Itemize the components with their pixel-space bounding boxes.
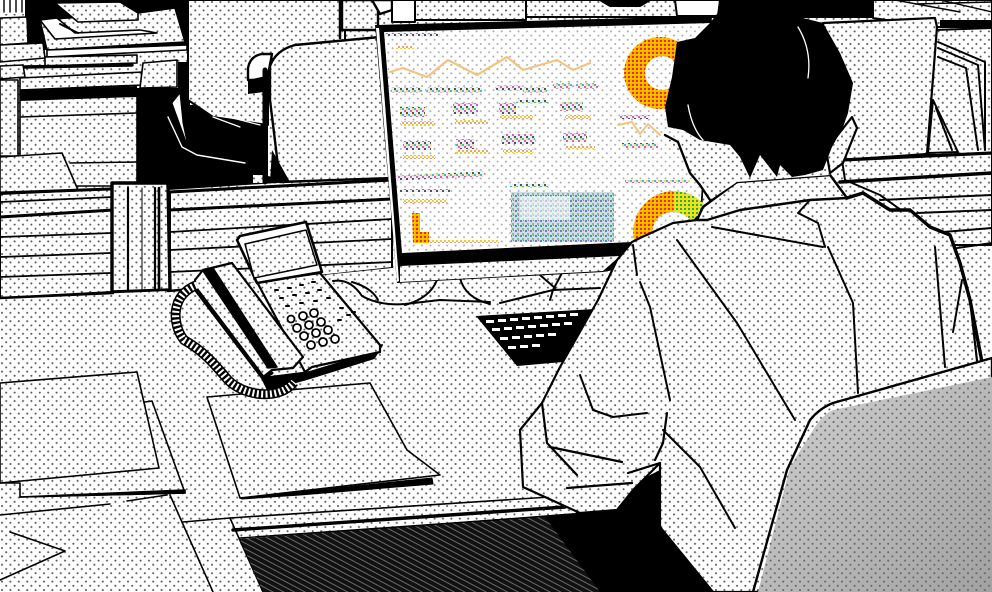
panel behind head: [823, 18, 937, 160]
desk surface: [0, 268, 640, 520]
office chair back in background: [248, 0, 392, 182]
right background binders: [925, 28, 992, 155]
gray office chair foreground: [753, 358, 992, 592]
phone handset: [195, 263, 303, 378]
monitor frame: [375, 16, 712, 283]
under desk hatching: [240, 470, 713, 592]
person shirt: [520, 175, 985, 592]
person hair: [665, 3, 853, 178]
phone coiled cord: [176, 285, 294, 394]
phone shadow: [262, 345, 382, 390]
dark area behind partition: [137, 62, 292, 190]
donut chart bottom green segment: [673, 191, 705, 222]
background: top shelf behind monitor: [392, 0, 992, 28]
background: shelves and stacked papers top left: [0, 0, 190, 194]
partition post: [112, 183, 170, 292]
person standing behind: torso and trousers: [168, 0, 345, 183]
phone display: [237, 222, 322, 283]
screen: dashboard content: [385, 33, 690, 243]
monitor cables and stand: [333, 273, 600, 305]
shirt collar: [697, 175, 847, 220]
donut chart bottom: [633, 191, 673, 240]
monitor: [375, 16, 712, 283]
desk phone: [176, 222, 382, 394]
person neck and ears: [665, 117, 857, 200]
desk front edge: [183, 496, 565, 592]
paper stack, left: [0, 372, 213, 592]
paper on desk, centre: [207, 383, 440, 499]
partition right: [840, 153, 992, 248]
monitor screen: [384, 23, 712, 253]
shirt folds: [542, 200, 962, 528]
donut chart top: [624, 37, 696, 109]
chart: red L-shaped bars: [412, 213, 429, 243]
keyboard: [476, 309, 595, 366]
phone base: [257, 273, 380, 372]
phone keypad: [288, 309, 339, 349]
desk partition left: [0, 180, 392, 298]
shirt outline right: [847, 193, 982, 362]
